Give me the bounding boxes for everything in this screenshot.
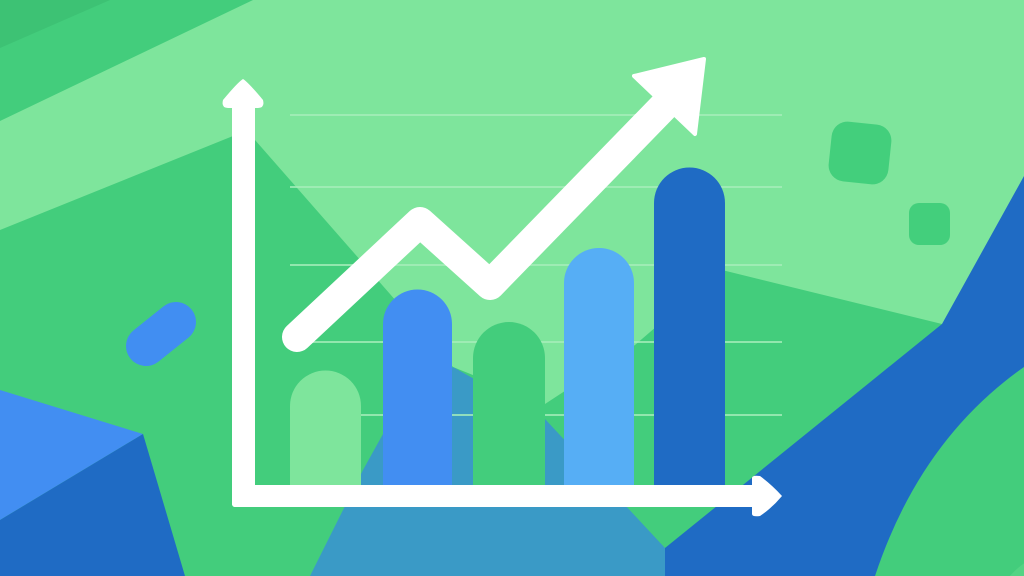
icon: blue pill — [146, 322, 176, 346]
icon: green blob large — [827, 120, 893, 186]
bar chart — [290, 168, 725, 485]
bar 3 — [473, 322, 545, 485]
bottom right light circle — [985, 545, 1024, 576]
axes — [223, 79, 782, 516]
bar 5 — [654, 168, 725, 485]
bar 4 — [564, 248, 634, 485]
trend arrow — [297, 59, 704, 337]
dark blue river band — [665, 176, 1024, 576]
bar 2 — [383, 290, 452, 485]
light blue left shape — [0, 390, 143, 520]
gridlines — [290, 115, 782, 415]
icon: green blob small — [909, 203, 950, 245]
teal ground — [310, 367, 665, 576]
bar 1 — [290, 370, 361, 485]
dark blue left shape — [0, 434, 185, 576]
